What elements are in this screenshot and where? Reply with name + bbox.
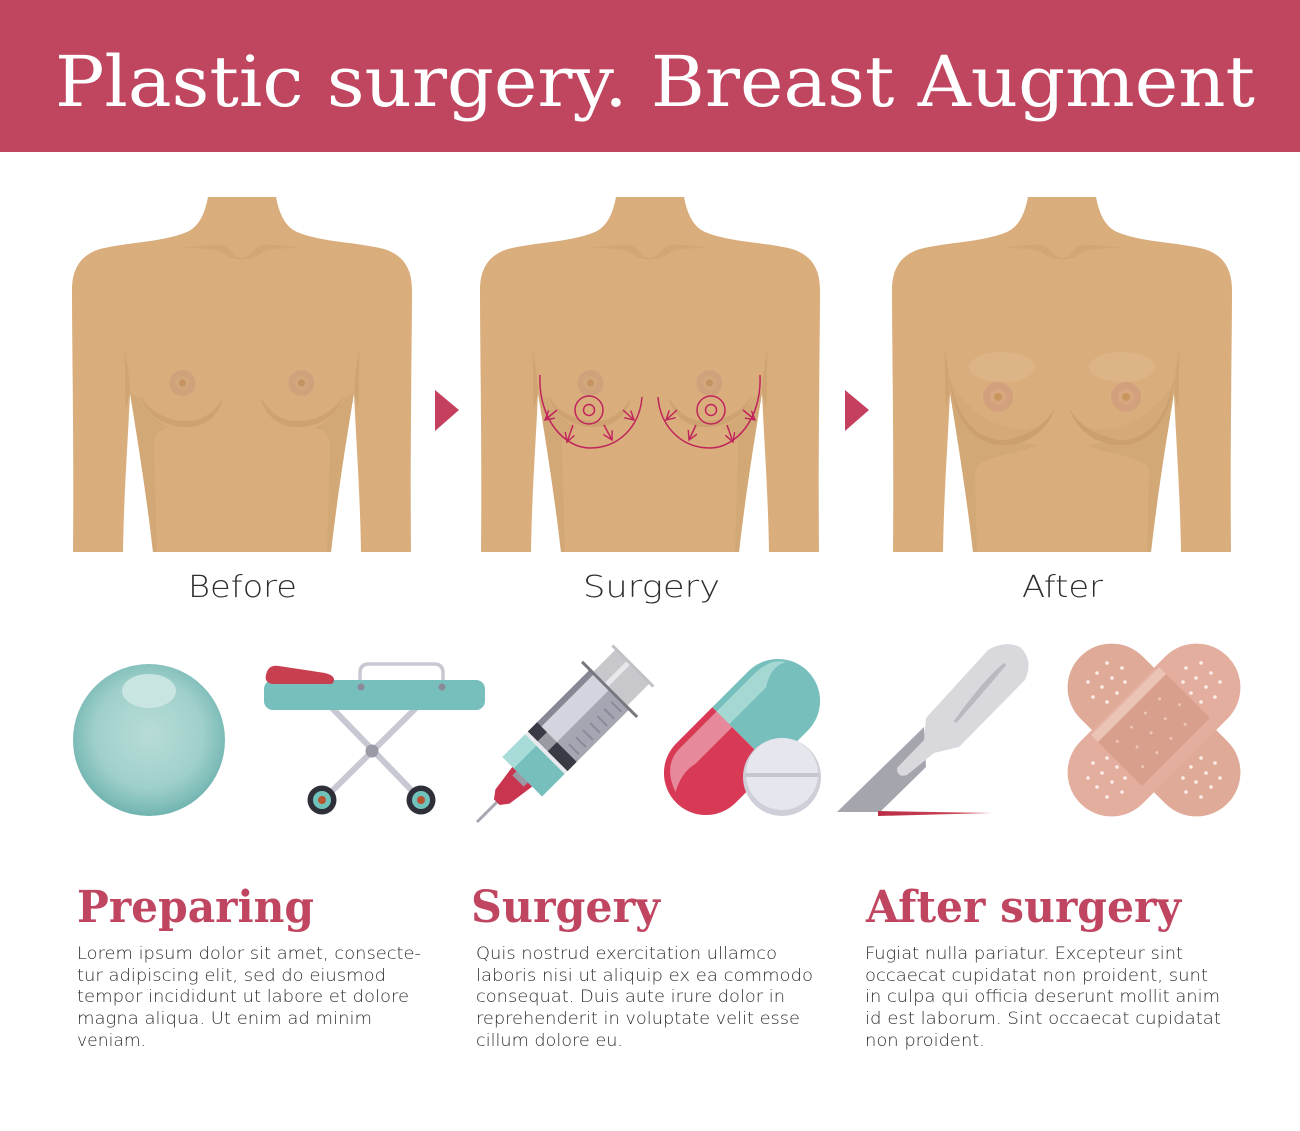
torso: after [892,197,1232,552]
text block: after surgery: non proident. [865,1031,985,1051]
icon: stretcher [264,664,485,814]
text block: preparing: magna aliqua. Ut enim ad minim [77,1009,372,1029]
torso: before [72,197,412,552]
icon: syringe [449,637,662,850]
label: surgery: Surgery [583,570,720,605]
text block: surgery [476,944,813,1051]
label: after: After [1022,570,1104,605]
text block: surgery: Quis nostrud exercitation ullamco [476,944,777,964]
text block: surgery: consequat. Duis aute irure dolor in [476,987,785,1007]
heading: surgery: Surgery [471,882,661,933]
text block: after surgery: Fugiat nulla pariatur. Excepteur sint [865,944,1183,964]
text block: surgery: reprehenderit in voluptate velit esse [476,1009,800,1029]
text block: preparing: veniam. [77,1031,146,1051]
icon: adhesive bandage [1049,625,1259,835]
header band [0,0,1300,152]
arrow: surgery to after [845,390,869,431]
text block: after surgery: in culpa qui officia deserunt mollit anim [865,987,1220,1007]
text block: preparing: tur adipiscing elit, sed do eiusmod [77,966,386,986]
column: surgery [471,882,813,1051]
heading: after surgery: After surgery [865,882,1182,933]
arrow: before to surgery [435,390,459,431]
text block: after surgery: occaecat cupidatat non proident, sunt [865,966,1208,986]
icon: capsule and tablet [647,642,837,832]
heading: preparing: Preparing [77,882,314,933]
column: preparing [77,882,421,1051]
text block: surgery: laboris nisi ut aliquip ex ea commodo [476,966,813,986]
text block: preparing [77,944,421,1051]
text block: after surgery: id est laborum. Sint occaecat cupidatat [865,1009,1221,1029]
icon: implant [73,664,225,816]
title: Plastic surgery. Breast Augment [55,41,1255,123]
text block: preparing: tempor incididunt ut labore et dolore [77,987,409,1007]
column: after surgery [865,882,1221,1051]
text block: preparing: Lorem ipsum dolor sit amet, consecte- [77,944,421,964]
label: before: Before [188,570,297,605]
torso: surgery with markings [480,197,820,552]
icon: scalpel [837,644,1029,816]
text block: after surgery [865,944,1221,1051]
text block: surgery: cillum dolore eu. [476,1031,623,1051]
